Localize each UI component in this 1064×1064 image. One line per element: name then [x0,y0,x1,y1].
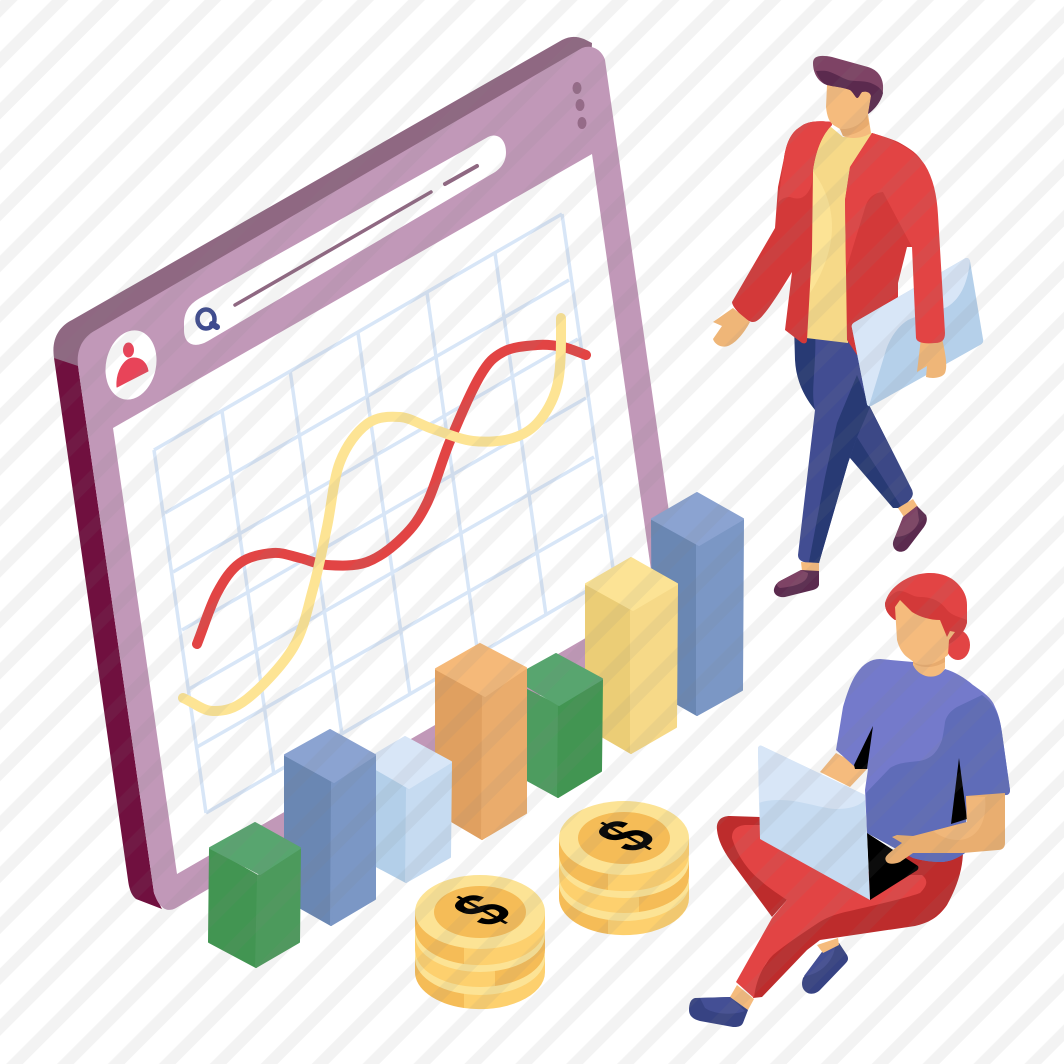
window left side [54,358,162,909]
icon: user avatar [99,326,163,404]
bar: green front [209,823,300,967]
bar: pale blue [376,737,451,882]
pants dark thigh [753,850,963,998]
front ankle [730,985,754,1010]
shirt [806,122,872,343]
tablet [852,258,983,406]
front shoe [689,997,748,1027]
man arm right [872,133,945,343]
walking man [713,56,983,597]
tablet light [852,258,970,406]
shirt highlight [810,170,832,293]
bar: orange [436,644,526,839]
browser window [53,37,683,910]
laptop screen [758,746,870,900]
man hair [813,56,883,114]
hair bun [946,630,970,660]
far leg highlight [857,407,913,508]
front shoe highlight [700,997,745,1014]
yellow line series [183,318,561,711]
woman face [895,600,955,665]
man hand right [917,338,946,378]
bar: green small [527,654,602,797]
pants dark back leg [717,816,787,917]
jacket right panel light [845,133,915,270]
window top side [53,37,592,370]
window control dots [572,82,586,129]
neck shadow [913,650,945,667]
back shoe [893,506,927,552]
t-shirt shade [866,695,1010,862]
address bar [184,135,506,345]
seated woman [689,573,1010,1027]
man neck and face [826,82,873,138]
bar: blue medium [285,730,375,925]
back shoe highlight [895,506,919,537]
address short line [445,166,477,184]
man hand left [713,308,750,347]
address text line [235,192,431,305]
front ankle [801,562,819,573]
chart grid [154,214,614,813]
screen [113,154,655,874]
bar: blue tall [652,493,743,715]
woman hair [885,573,967,645]
neck shadow [840,115,869,136]
sleeve gap right [951,758,967,824]
back shoe highlight [804,945,835,976]
front shoe [774,570,819,597]
near leg shade [809,375,870,563]
coin stack back [559,801,689,935]
far leg [794,325,913,508]
laptop screen light [758,746,865,809]
back shoe [802,943,848,994]
t-shirt [836,659,1010,862]
jacket right panel shade [845,133,925,355]
man hair shade [816,71,883,114]
bar: yellow [586,558,677,753]
laptop base [867,833,918,900]
back foot ankle [898,499,918,517]
pants light [732,825,926,998]
coin stack front: $ [435,884,529,936]
near leg [798,325,870,563]
arm highlight [933,796,985,840]
jacket left panel [732,121,832,343]
woman neck [913,650,945,677]
red line series [197,345,586,644]
sleeve gap left [854,726,873,769]
front shoe highlight [777,570,808,588]
icon: search [198,310,217,328]
jacket left panel light [778,121,832,203]
woman left arm [820,753,867,787]
woman hair shade [885,591,967,645]
woman right arm [885,793,1005,864]
back ankle [817,938,839,953]
coin stack front [415,875,545,1009]
window bezel [78,47,683,910]
coin stack back: $ [579,810,673,862]
